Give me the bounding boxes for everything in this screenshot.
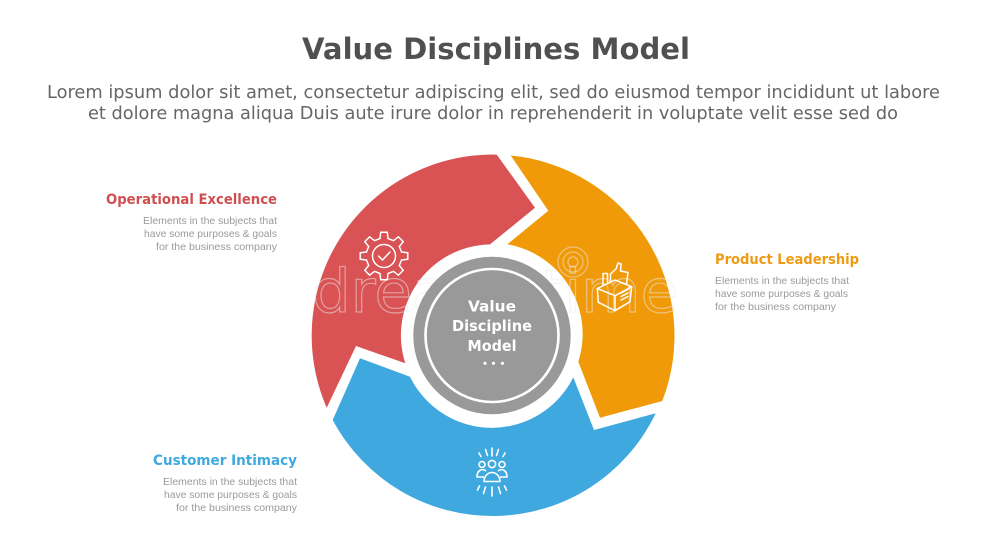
title: Value Disciplines Model [302, 32, 690, 66]
label: customer intimacy: Customer Intimacy [153, 453, 297, 469]
icon: box with thumbs up [597, 263, 632, 311]
description: operational excellence: Elements in the subjects that [143, 215, 277, 227]
center circle [413, 257, 571, 414]
label: product leadership: Product Leadership [715, 252, 859, 268]
description: product leadership [715, 275, 849, 313]
segment: product leadership arrow [507, 156, 674, 418]
segment: customer intimacy arrow [333, 358, 656, 516]
center label: Discipline [452, 317, 532, 335]
description: customer intimacy: Elements in the subjects that [163, 476, 297, 488]
watermark: dreamstime [312, 257, 678, 327]
description: operational excellence: have some purposes & goals [144, 228, 277, 240]
subtitle text: et dolore magna aliqua Duis aute irure dolor in reprehenderit in voluptate velit esse sed do [88, 103, 898, 124]
description: product leadership: for the business company [715, 301, 837, 313]
description: product leadership: have some purposes & goals [715, 288, 848, 300]
description: customer intimacy: have some purposes & goals [164, 489, 297, 501]
description: customer intimacy [163, 476, 298, 514]
label: product leadership [715, 252, 859, 313]
description: operational excellence [143, 215, 278, 253]
icon: people group [477, 448, 507, 496]
description: product leadership: Elements in the subjects that [715, 275, 849, 287]
center label: Model [468, 337, 516, 355]
description: operational excellence: for the business company [156, 241, 278, 253]
icon: gear with check [360, 232, 408, 280]
label: operational excellence [106, 192, 278, 253]
description: customer intimacy: for the business company [176, 502, 298, 514]
center label: Value [468, 298, 516, 316]
subtitle text: Lorem ipsum dolor sit amet, consectetur adipiscing elit, sed do eiusmod tempor incididunt ut labore [47, 82, 940, 103]
center label [452, 298, 532, 355]
subtitle text [47, 82, 940, 124]
label: operational excellence: Operational Excellence [106, 192, 277, 208]
segment: operational excellence arrow [312, 155, 535, 408]
label: customer intimacy [153, 453, 298, 514]
center dots [483, 362, 504, 365]
